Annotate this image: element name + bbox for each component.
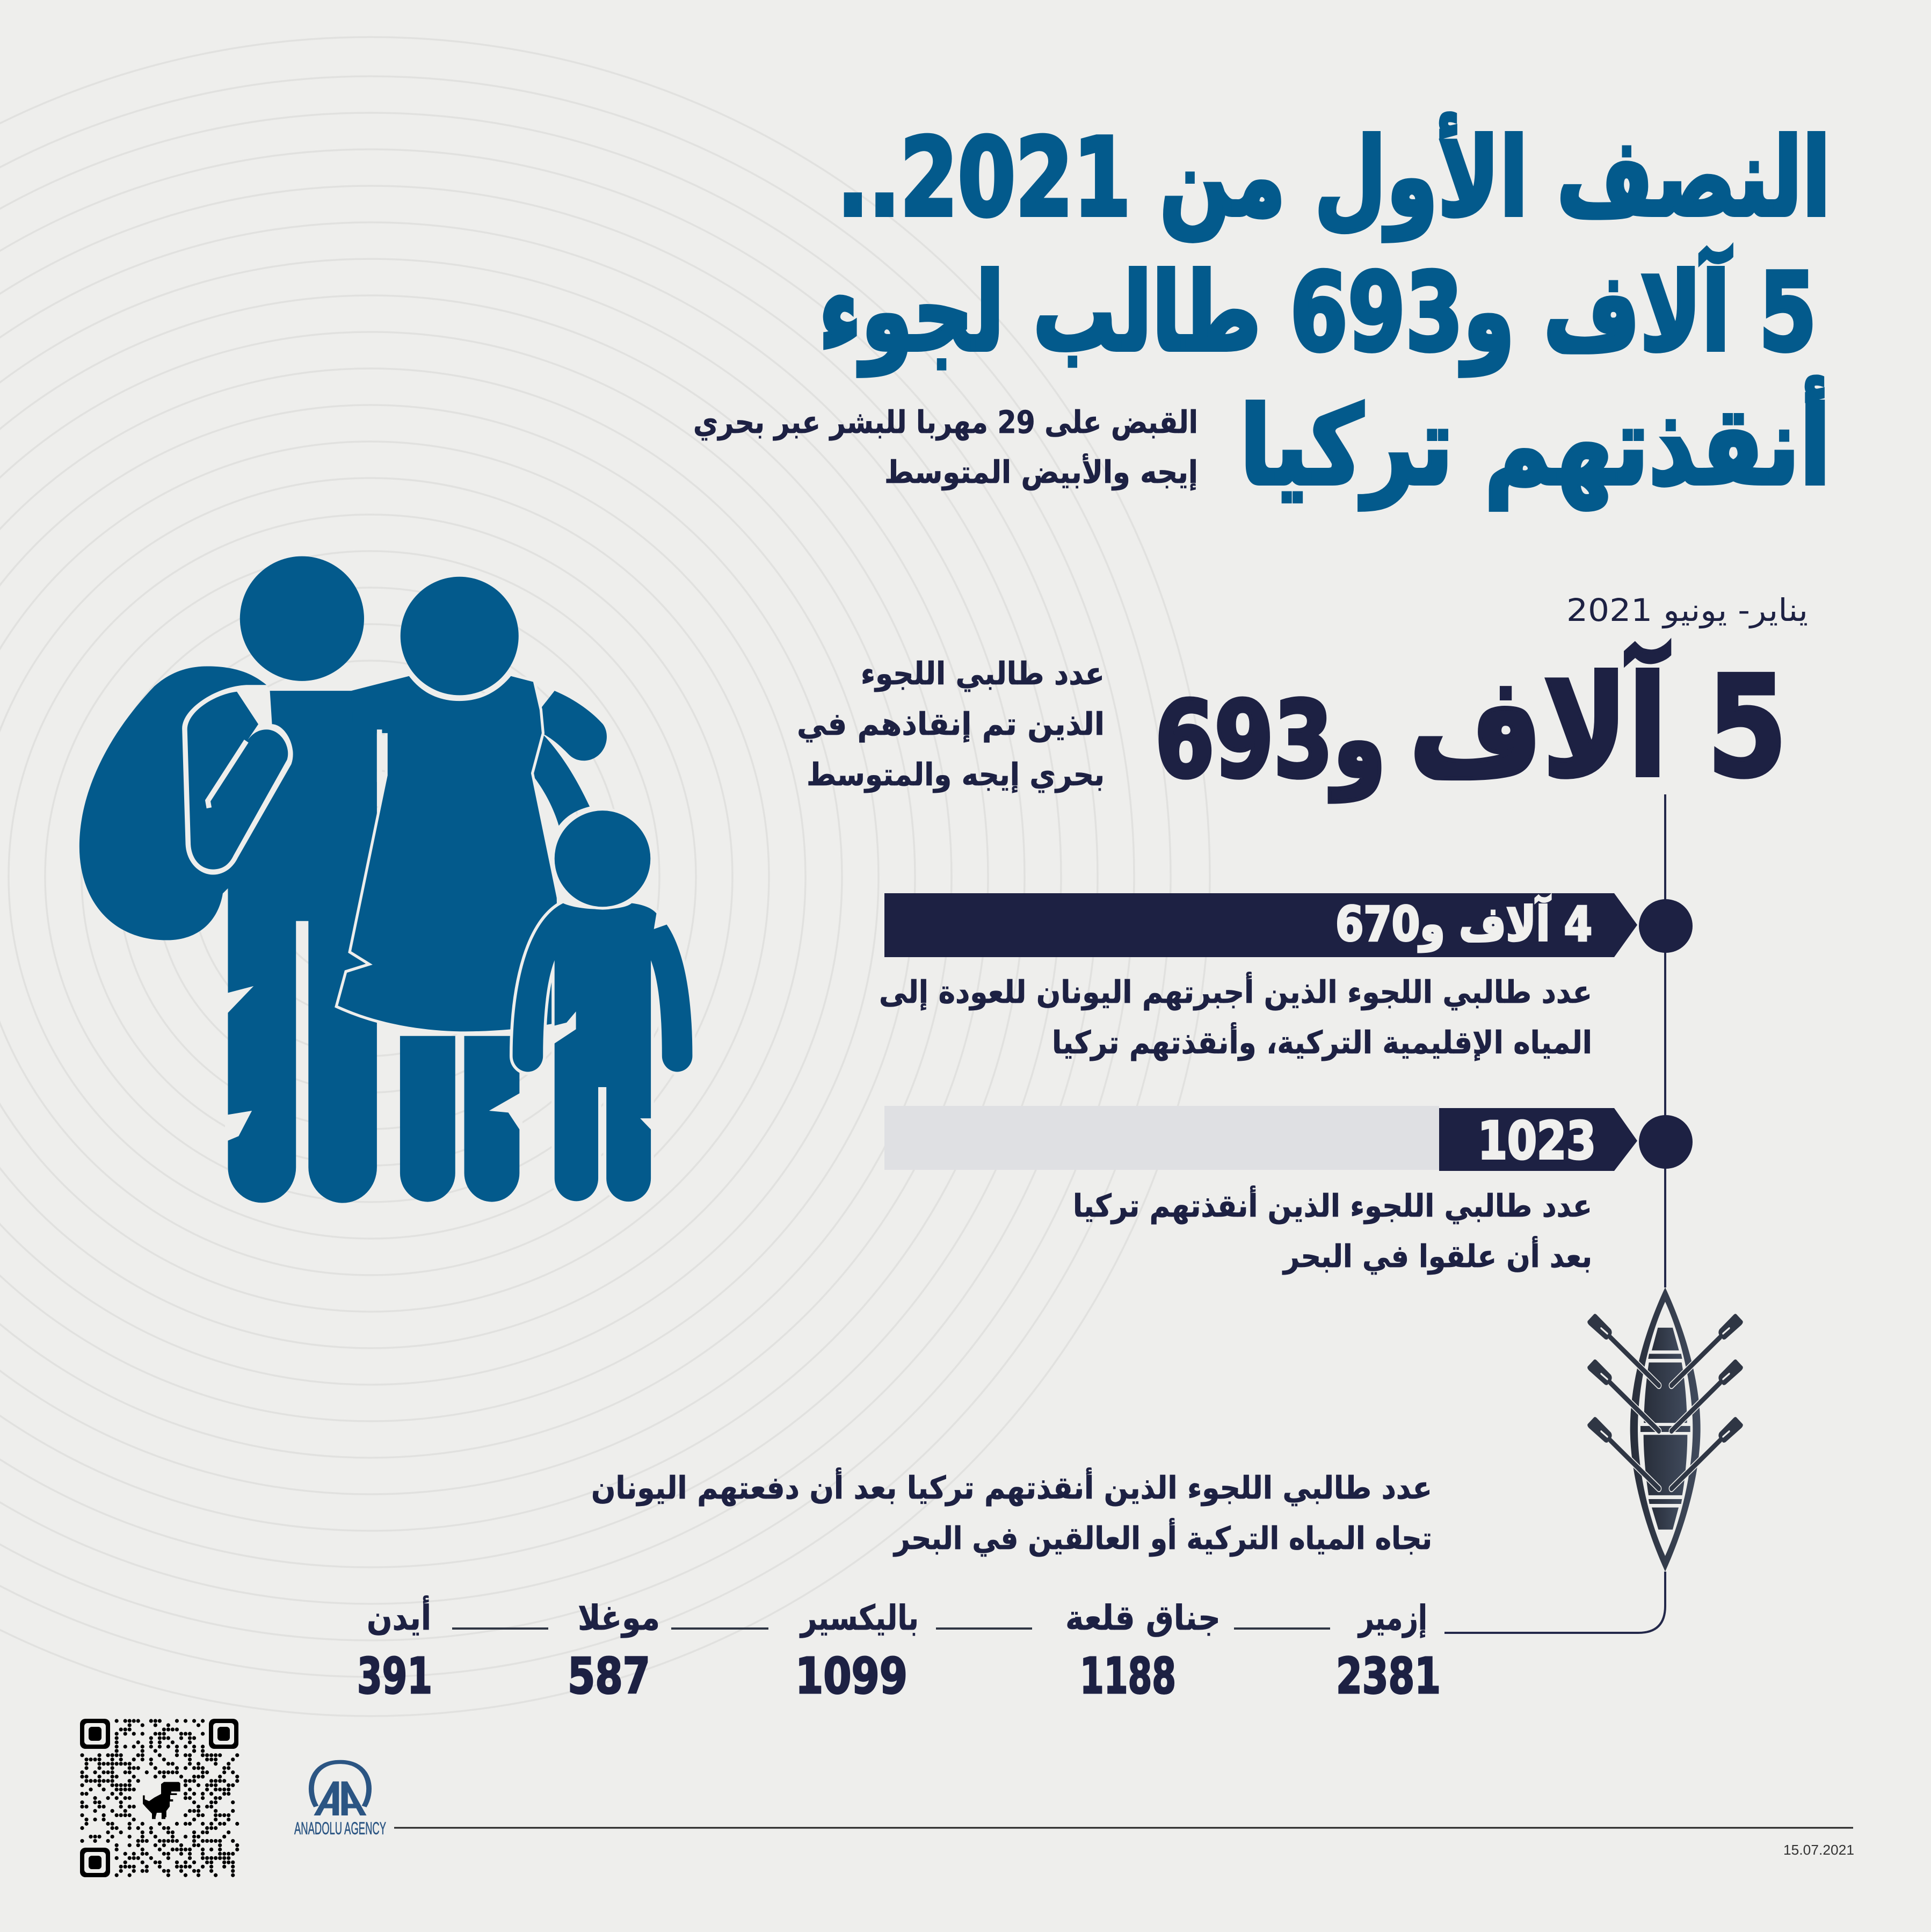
timeline marker 1 bbox=[1639, 899, 1693, 953]
bar: stranded count bbox=[884, 1106, 1637, 1171]
title: أنقذتهم تركيا bbox=[1240, 377, 1831, 510]
title bbox=[819, 113, 1831, 510]
bar: forced back count bbox=[884, 893, 1637, 957]
date stamp: 15.07.2021 bbox=[1783, 1842, 1854, 1858]
city: Canakkale: جناق قلعة bbox=[1065, 1598, 1221, 1638]
icon: rowing boat bbox=[1587, 1287, 1743, 1572]
description: stranded: عدد طالبي اللجوء الذين أنقذتهم تركيا bbox=[1073, 1185, 1592, 1225]
city: Balikesir: 1099 bbox=[795, 1647, 908, 1705]
bar: forced back count: 4 آلاف و670 bbox=[1335, 895, 1592, 952]
description: stranded bbox=[1073, 1185, 1592, 1275]
total description: عدد طالبي اللجوء bbox=[861, 655, 1105, 692]
QR code bbox=[80, 1719, 238, 1877]
big total number: و693 bbox=[1155, 679, 1386, 802]
city: Izmir bbox=[1336, 1598, 1441, 1705]
logo: Anadolu Agency bbox=[294, 1762, 386, 1838]
bar: stranded count: 1023 bbox=[1478, 1111, 1596, 1171]
city: Aydin: 391 bbox=[357, 1647, 432, 1705]
big total number: 5 آلاف bbox=[1409, 641, 1787, 808]
description: forced back: عدد طالبي اللجوء الذين أجبرتهم اليونان للعودة إلى bbox=[879, 972, 1592, 1011]
subtitle text bbox=[693, 404, 1198, 491]
description: forced back: المياه الإقليمية التركية، وأنقذتهم تركيا bbox=[1052, 1022, 1592, 1061]
city: Balikesir: باليكسير bbox=[800, 1598, 919, 1638]
man bbox=[228, 556, 377, 1203]
city: Aydin: أيدن bbox=[367, 1595, 431, 1638]
city: Balikesir bbox=[795, 1598, 919, 1705]
big total number bbox=[1155, 641, 1787, 808]
backpack bbox=[79, 666, 268, 940]
description: by-city chart heading: عدد طالبي اللجوء الذين أنقذتهم تركيا بعد أن دفعتهم اليونان bbox=[591, 1467, 1432, 1507]
timeline marker 2 bbox=[1639, 1115, 1693, 1169]
timeline connector line bbox=[1444, 794, 1665, 1633]
subtitle text: القبض على 29 مهربا للبشر عبر بحري bbox=[693, 404, 1198, 441]
logo: Anadolu Agency: ANADOLU AGENCY bbox=[294, 1819, 386, 1838]
footer rule bbox=[394, 1827, 1853, 1828]
description: by-city chart heading: تجاه المياه التركية أو العالقين في البحر bbox=[892, 1518, 1432, 1557]
city: Aydin bbox=[357, 1595, 432, 1705]
city: Canakkale: 1188 bbox=[1080, 1647, 1176, 1705]
child bbox=[513, 811, 692, 1202]
city: Canakkale bbox=[1065, 1598, 1221, 1705]
title: 5 آلاف و693 طالب لجوء bbox=[819, 247, 1817, 376]
subtitle text: إيجه والأبيض المتوسط bbox=[884, 453, 1198, 491]
total description: الذين تم إنقاذهم في bbox=[797, 706, 1105, 743]
description: stranded: بعد أن علقوا في البحر bbox=[1282, 1236, 1592, 1275]
total description: بحري إيجه والمتوسط bbox=[807, 756, 1105, 793]
city: Mugla: موغلا bbox=[578, 1598, 660, 1638]
date range: يناير- يونيو 2021 bbox=[1566, 592, 1808, 629]
description: by-city chart heading bbox=[591, 1467, 1432, 1557]
city: Mugla: 587 bbox=[568, 1647, 650, 1705]
city: Mugla bbox=[568, 1598, 660, 1705]
city: Izmir: إزمير bbox=[1357, 1598, 1427, 1638]
woman bbox=[338, 577, 607, 1202]
icon: family of refugees bbox=[79, 556, 692, 1203]
description: forced back bbox=[879, 972, 1592, 1061]
total description bbox=[797, 655, 1105, 793]
city: Izmir: 2381 bbox=[1336, 1647, 1441, 1705]
